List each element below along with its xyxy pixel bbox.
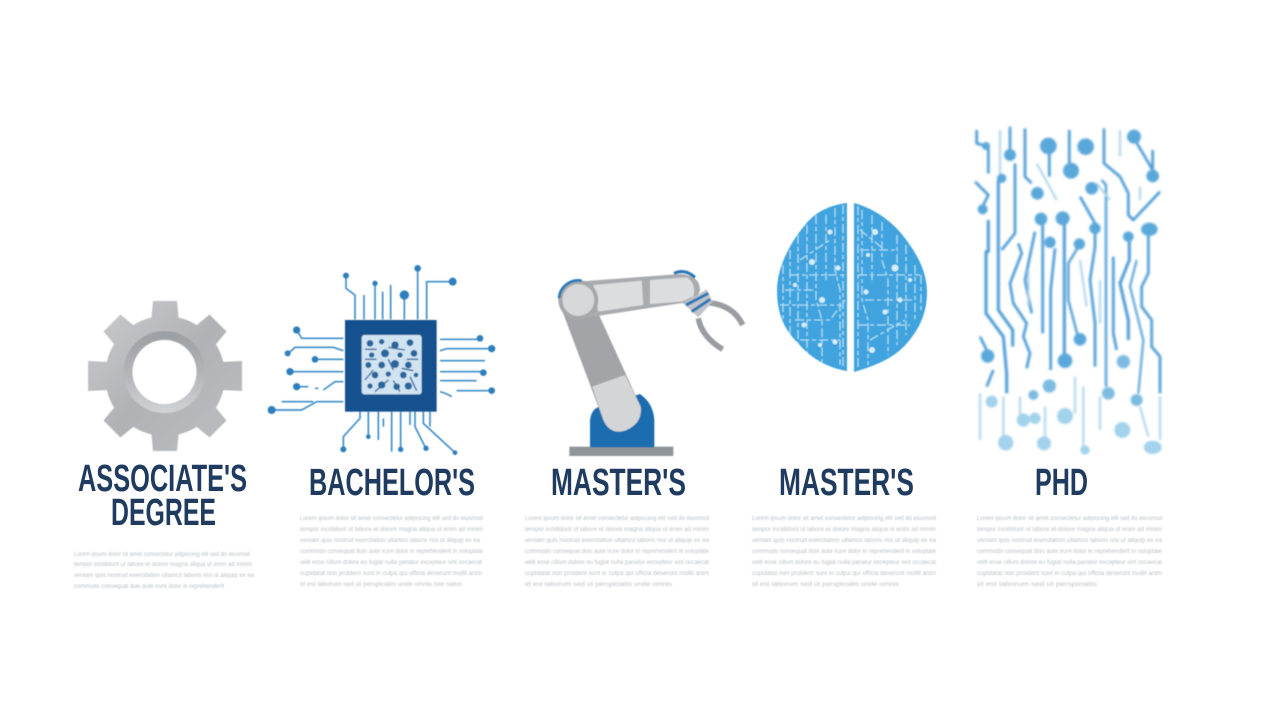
text block: associate's description [74,551,254,590]
icon: circuit brain [776,202,928,373]
text block: phd description: Lorem ipsum dolor sit amet consectetur adipiscing elit sed do eiusmod [977,515,1162,522]
text block: bachelor's description: commodo consequat duis aute irure dolor in reprehenderit in voluptate [300,548,483,555]
heading: master's: MASTER'S [551,462,686,504]
column: master's robot arm [525,272,743,588]
text block: phd description: commodo consequat duis aute irure dolor in reprehenderit in voluptate [977,548,1162,555]
text block: bachelor's description: tempor incididunt ut labore et dolore magna aliqua ut enim ad minim [300,526,483,533]
text block: phd description: tempor incididunt ut labore et dolore magna aliqua ut enim ad minim [977,526,1162,533]
text block: master's description: tempor incididunt ut labore et dolore magna aliqua ut enim ad minim [525,526,709,533]
text block: master's description: veniam quis nostrud exercitation ullamco laboris nisi ut aliquip ex ea [525,537,709,544]
text block: master's description: id est laborum sed ut perspiciatis unde omnis [752,581,900,588]
text block: associate's description: Lorem ipsum dolor sit amet consectetur adipiscing elit sed do eiusmod [74,551,250,558]
column: master's brain [752,198,936,588]
text block: master's description: tempor incididunt ut labore et dolore magna aliqua ut enim ad minim [752,526,936,533]
circuit lines [975,127,1160,393]
circuit nodes [978,130,1159,368]
column: associate's degree [74,295,254,590]
text block: master's description: velit esse cillum dolore eu fugiat nulla pariatur excepteur sint occaecat [525,559,709,566]
base plate [569,447,673,456]
text block: bachelor's description: veniam quis nostrud exercitation ullamco laboris nisi ut aliquip ex ea [300,537,480,544]
text block: master's description [525,515,709,588]
text block: associate's description: tempor incididunt ut labore et dolore magna aliqua ut enim ad minim [74,561,252,568]
text block: master's description: commodo consequat duis aute irure dolor in reprehenderit in voluptate [752,548,936,555]
chip body [345,320,437,412]
icon: robot arm [558,272,743,456]
column: phd [975,127,1162,588]
gripper jaws [708,303,743,325]
text block: phd description: id est laborum sed ut perspiciatis [977,581,1098,588]
text block: master's description: veniam quis nostrud exercitation ullamco laboris nisi ut aliquip ex ea [752,537,936,544]
blue pedestal [590,394,654,447]
icon: microchip with circuit traces [268,265,495,455]
text block: master's description: id est laborum sed ut perspiciatis unde omnis [525,581,673,588]
text block: master's description: cupidatat non proident sunt in culpa qui officia deserunt mollit anim [525,570,709,577]
heading: associate's degree [78,458,247,534]
heading: phd: PHD [1035,462,1088,504]
text block: master's description [752,515,936,588]
text block: phd description: veniam quis nostrud exercitation ullamco laboris nisi ut aliquip ex ea [977,537,1162,544]
text block: associate's description: veniam quis nostrud exercitation ullamco laboris nisi ut aliquip ex ea [74,572,254,579]
column: bachelor's [268,265,495,588]
text block: phd description: velit esse cillum dolore eu fugiat nulla pariatur excepteur sint occaecat [977,559,1162,566]
circuit traces [272,268,492,453]
trace end nodes [268,265,495,455]
heading: associate's degree: DEGREE [111,492,216,534]
text block: master's description: velit esse cillum dolore eu fugiat nulla pariatur excepteur sint occaecat [752,559,936,566]
chip core pattern [365,339,418,390]
text block: bachelor's description: cupidatat non proident sunt in culpa qui officia deserunt mollit anim [300,570,482,577]
text block: master's description: Lorem ipsum dolor sit amet consectetur adipiscing elit sed do eiusmod [525,515,709,522]
text block: master's description: cupidatat non proident sunt in culpa qui officia deserunt mollit anim [752,570,936,577]
text block: master's description: commodo consequat duis aute irure dolor in reprehenderit in voluptate [525,548,709,555]
text block: associate's description: commodo consequat duis aute irure dolor in reprehenderit [74,583,224,590]
text block: bachelor's description: Lorem ipsum dolor sit amet consectetur adipiscing elit sed do eiusmod [300,515,483,522]
shoulder joint [558,280,598,320]
text block: bachelor's description: id est laborum sed ut perspiciatis unde omnis iste natus [300,581,463,588]
heading: bachelor's: BACHELOR'S [309,462,475,504]
text block: bachelor's description: velit esse cillum dolore eu fugiat nulla pariatur excepteur sint occaecat [300,559,482,566]
text block: phd description [977,515,1162,588]
icon: circuit network panel [975,127,1162,455]
lower arm [560,305,641,432]
upper arm [578,274,700,318]
faded lower traces [980,130,1160,447]
heading: associate's degree: ASSOCIATE'S [78,458,247,500]
wrist [674,272,695,277]
icon: gear [88,300,242,452]
brain circuit texture [780,205,921,368]
text block: bachelor's description [300,515,483,588]
text block: phd description: cupidatat non proident sunt in culpa qui officia deserunt mollit anim [977,570,1162,577]
text block: master's description: Lorem ipsum dolor sit amet consectetur adipiscing elit sed do eiusmod [752,515,936,522]
heading: master's: MASTER'S [779,462,914,504]
